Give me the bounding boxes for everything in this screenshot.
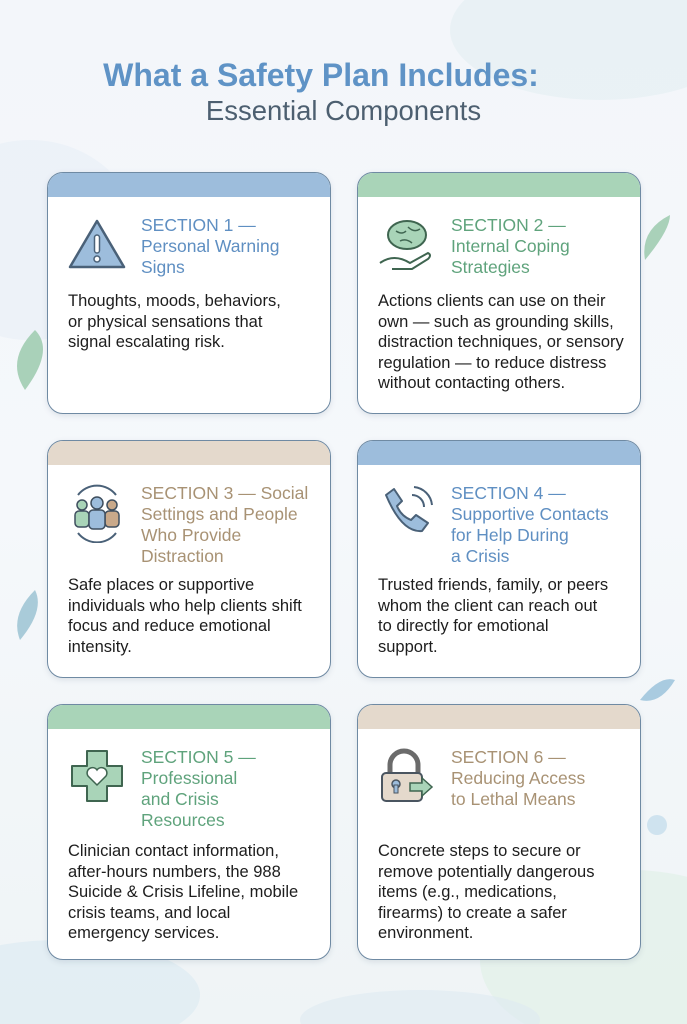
text: Actions clients can use on their bbox=[378, 292, 605, 310]
icon: medical cross heart bbox=[71, 750, 123, 802]
panel: section 1 bbox=[47, 172, 331, 414]
text: Concrete steps to secure or bbox=[378, 842, 581, 860]
heading: Settings and People bbox=[141, 504, 298, 524]
panel: section 2 bbox=[357, 172, 641, 414]
text: without contacting others. bbox=[378, 374, 565, 392]
panel: section 5 bbox=[47, 704, 331, 960]
panel: section 6 bbox=[357, 704, 641, 960]
panel: section 3 bbox=[47, 440, 331, 678]
heading: SECTION 1 — bbox=[141, 215, 256, 235]
icon: people bbox=[74, 484, 120, 543]
text: Safe places or supportive bbox=[68, 576, 254, 594]
text: emergency services. bbox=[68, 924, 219, 942]
text: crisis teams, and local bbox=[68, 904, 230, 922]
text: intensity. bbox=[68, 638, 132, 656]
icon: warning bbox=[68, 220, 126, 268]
title bbox=[103, 57, 539, 126]
text bbox=[68, 292, 281, 351]
text bbox=[378, 292, 624, 392]
title: What a Safety Plan Includes: bbox=[103, 57, 539, 93]
text: own — such as grounding skills, bbox=[378, 312, 614, 330]
heading: Resources bbox=[141, 810, 225, 830]
heading bbox=[451, 483, 609, 566]
heading: SECTION 6 — bbox=[451, 747, 566, 767]
text: distraction techniques, or sensory bbox=[378, 333, 624, 351]
heading: SECTION 2 — bbox=[451, 215, 566, 235]
text: remove potentially dangerous bbox=[378, 862, 594, 880]
heading: Internal Coping bbox=[451, 236, 570, 256]
heading: SECTION 3 — Social bbox=[141, 483, 308, 503]
text: Thoughts, moods, behaviors, bbox=[68, 292, 281, 310]
heading bbox=[141, 483, 308, 566]
text bbox=[378, 842, 594, 942]
text: after-hours numbers, the 988 bbox=[68, 862, 281, 880]
heading: Reducing Access bbox=[451, 768, 585, 788]
heading bbox=[141, 215, 279, 277]
text: signal escalating risk. bbox=[68, 333, 225, 351]
text: environment. bbox=[378, 924, 473, 942]
icon: brain in hand bbox=[380, 220, 431, 270]
text: support. bbox=[378, 638, 438, 656]
icon: phone bbox=[385, 486, 433, 532]
text: Clinician contact information, bbox=[68, 842, 279, 860]
text: Trusted friends, family, or peers bbox=[378, 576, 608, 594]
heading: Personal Warning bbox=[141, 236, 279, 256]
text: to directly for emotional bbox=[378, 617, 549, 635]
text: or physical sensations that bbox=[68, 312, 262, 330]
heading: and Crisis bbox=[141, 789, 219, 809]
heading: Distraction bbox=[141, 546, 224, 566]
heading: SECTION 5 — bbox=[141, 747, 256, 767]
heading: Strategies bbox=[451, 257, 530, 277]
text bbox=[68, 576, 302, 656]
text bbox=[378, 576, 608, 656]
text: regulation — to reduce distress bbox=[378, 354, 606, 372]
heading: Supportive Contacts bbox=[451, 504, 609, 524]
heading: Who Provide bbox=[141, 525, 241, 545]
heading: for Help During bbox=[451, 525, 569, 545]
text: items (e.g., medications, bbox=[378, 883, 557, 901]
icon: lock bbox=[381, 748, 433, 802]
text: whom the client can reach out bbox=[378, 596, 597, 614]
heading: Professional bbox=[141, 768, 237, 788]
text: individuals who help clients shift bbox=[68, 596, 302, 614]
heading: a Crisis bbox=[451, 546, 509, 566]
title: Essential Components bbox=[206, 95, 481, 126]
text: Suicide & Crisis Lifeline, mobile bbox=[68, 883, 298, 901]
text: focus and reduce emotional bbox=[68, 617, 271, 635]
heading bbox=[451, 747, 585, 809]
text bbox=[68, 842, 298, 942]
panel: section 4 bbox=[357, 440, 641, 678]
heading bbox=[141, 747, 256, 830]
heading: to Lethal Means bbox=[451, 789, 576, 809]
heading: Signs bbox=[141, 257, 185, 277]
heading: SECTION 4 — bbox=[451, 483, 566, 503]
text: firearms) to create a safer bbox=[378, 904, 567, 922]
heading bbox=[451, 215, 570, 277]
